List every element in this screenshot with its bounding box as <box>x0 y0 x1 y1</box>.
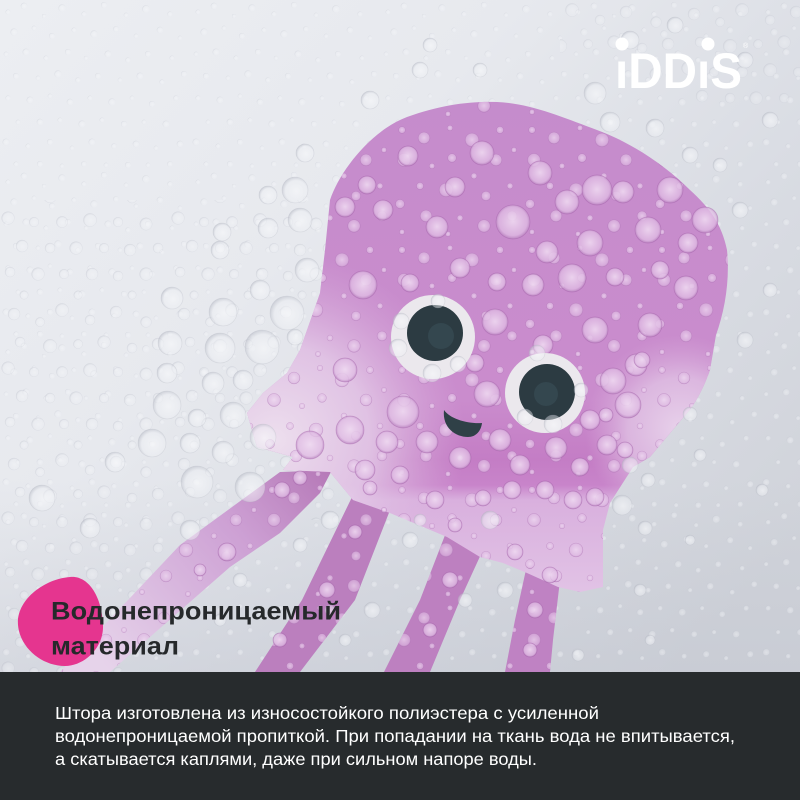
tentacle 1 <box>60 470 332 672</box>
accent blob <box>18 577 103 666</box>
tentacle 2 <box>255 495 392 672</box>
droplets on fabric <box>29 17 778 661</box>
right lobe lighter wash <box>595 347 712 487</box>
icon: right eye <box>505 345 588 433</box>
description text: Штора изготовлена из износостойкого полиэстера с усиленной <box>55 703 599 723</box>
octopus body <box>247 102 728 592</box>
heading: материал <box>51 632 179 660</box>
icon: left eye <box>389 294 475 382</box>
tentacle 3 <box>384 530 482 672</box>
panel: description <box>0 672 800 800</box>
heading: Водонепроницаемый <box>51 598 341 626</box>
description text: водонепроницаемой пропиткой. При попадании на ткань вода не впитывается, <box>55 726 735 746</box>
description text <box>55 703 735 769</box>
icon: smile <box>444 410 482 437</box>
heading <box>51 598 341 660</box>
tentacles small droplets <box>60 470 560 672</box>
description text: а скатывается каплями, даже при сильном напоре воды. <box>55 749 537 769</box>
tentacle 4 <box>505 565 560 672</box>
droplets on octopus <box>194 141 718 657</box>
body small droplets <box>247 102 728 592</box>
logo: IDDIS: ® <box>743 42 749 50</box>
neck lighter wash <box>247 281 447 512</box>
logo: IDDIS: ıDDıS <box>615 43 742 99</box>
illustration: pink octopus <box>60 102 728 672</box>
